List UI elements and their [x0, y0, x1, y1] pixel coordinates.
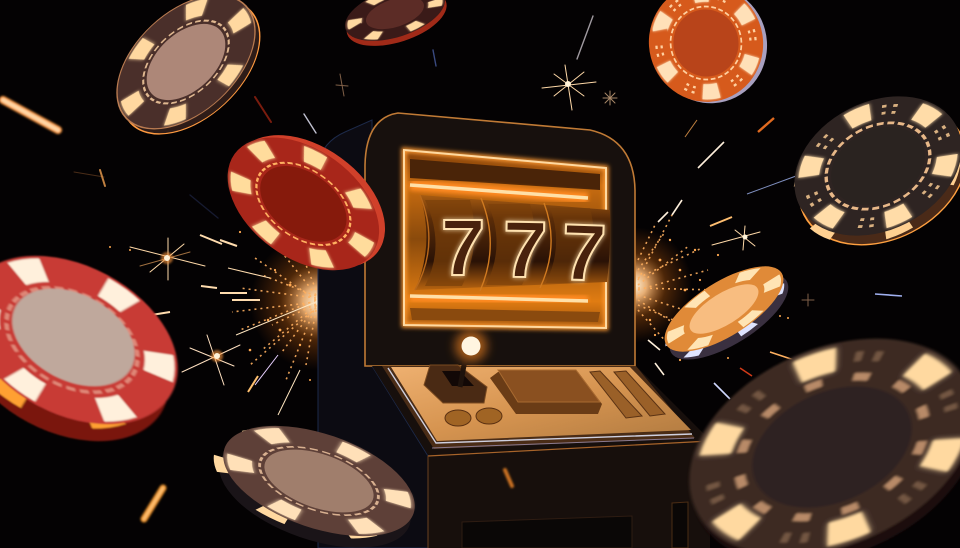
chip: right dark: [747, 54, 960, 290]
slot machine cabinet: [318, 113, 710, 548]
display pad: [490, 370, 602, 414]
spark burst right: [576, 118, 902, 399]
joystick: [424, 330, 487, 403]
cabinet front top: [365, 113, 635, 366]
star sparkles: [74, 16, 814, 385]
round buttons: [445, 408, 502, 426]
neon bar bottom: [410, 296, 588, 301]
neon bar top: [410, 185, 588, 198]
star small: [603, 91, 617, 105]
chip: red centre-left: [203, 106, 410, 300]
star: [712, 226, 760, 250]
sevens: 7: [502, 205, 548, 294]
sevens: 7: [441, 203, 485, 292]
blurred streaks: [3, 100, 512, 519]
sevens: 7: [560, 207, 608, 298]
spark burst left: [109, 231, 386, 415]
chip: large red left: [0, 195, 227, 491]
chip: right thin: [650, 250, 801, 377]
reels: [415, 195, 610, 291]
star: [182, 335, 240, 385]
thin streaks: [190, 16, 593, 218]
cabinet base: [372, 366, 710, 548]
chip: top right: [622, 0, 790, 128]
neon screen: [404, 150, 610, 328]
star: [542, 65, 596, 110]
chip: top centre: [338, 0, 454, 57]
chip: bottom centre: [171, 386, 448, 548]
sevens: [441, 203, 608, 298]
chip: top left: [92, 0, 285, 160]
cabinet side panel: [318, 120, 428, 548]
star small: [74, 74, 814, 306]
button rows: [590, 371, 665, 418]
star: [130, 238, 205, 280]
control panel: [382, 330, 695, 449]
chip: large bottom right: [629, 274, 960, 548]
